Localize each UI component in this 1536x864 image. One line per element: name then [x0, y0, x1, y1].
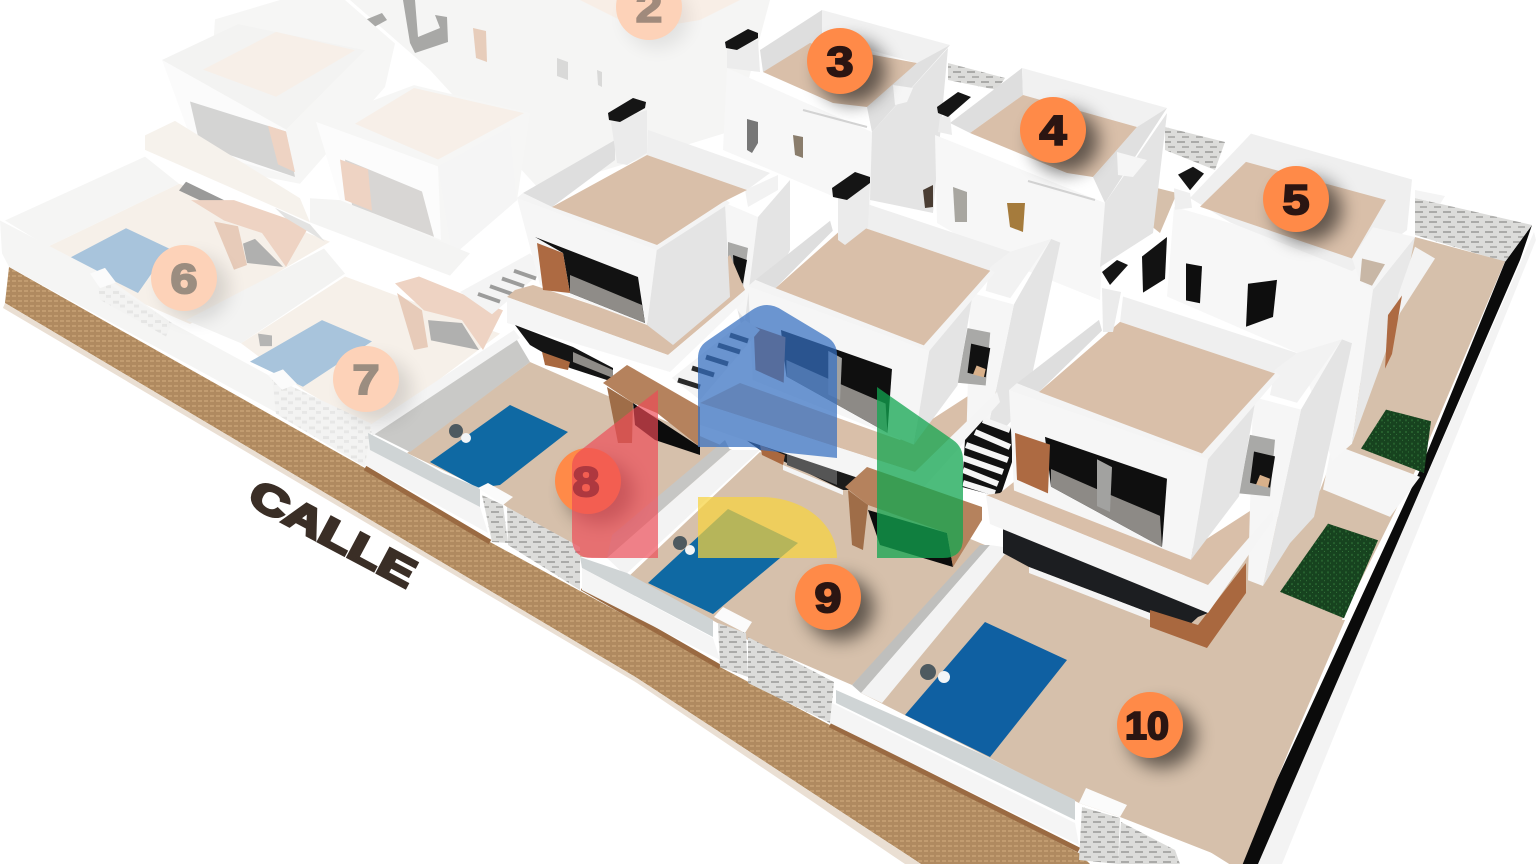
marker 7: 7 [352, 356, 380, 403]
marker 9: 9 [814, 574, 842, 621]
right-hand boundary wall [1238, 190, 1536, 864]
pergola lot 8 [603, 365, 700, 455]
pool 8 [430, 405, 568, 488]
gate pier 3 [1079, 788, 1127, 864]
chimney 5 [1174, 167, 1204, 210]
house 5 [1142, 134, 1435, 461]
street kerb line [3, 303, 921, 864]
marker 4: 4 [1040, 107, 1067, 154]
lot 9 ground and pool [607, 440, 985, 685]
street label: CALLE [242, 472, 423, 596]
chimney 3 [725, 29, 760, 72]
house C (front right, lot 10) [1009, 296, 1352, 586]
gate pier 2 [714, 607, 752, 677]
faded lot 7 [186, 249, 545, 430]
logo watermark [572, 305, 963, 558]
house B (front centre, lot 9) [748, 199, 1060, 469]
pool 9 [648, 509, 798, 614]
pergola lot 9 [845, 467, 982, 567]
marker 2 [616, 0, 689, 48]
marker 3 [807, 28, 886, 104]
marker 8: 8 [572, 458, 600, 505]
chimney B [832, 172, 870, 245]
marker 10: 10 [1125, 705, 1169, 748]
marker 6 [151, 245, 229, 320]
street brick strip [5, 267, 1090, 864]
marker 5 [1263, 166, 1342, 242]
marker 5: 5 [1282, 176, 1310, 223]
pool 10 [905, 622, 1067, 757]
house 4 [923, 68, 1167, 300]
logo: green house part [877, 387, 963, 558]
front wall lots 8, 9 and 10 [365, 433, 1180, 864]
back stone walls [948, 63, 1225, 233]
logo: blue house part [698, 305, 837, 458]
balcony floor C [986, 481, 1273, 585]
marker 8 [555, 448, 634, 524]
balcony band A [507, 290, 745, 372]
shower 8 [449, 424, 471, 443]
right-hand garden strip [1100, 237, 1505, 864]
faded upper-left house [145, 0, 395, 222]
balcony band B [700, 392, 1000, 497]
balcony band C [986, 495, 1273, 648]
faded left lots and houses [0, 0, 545, 467]
shower 9 [673, 536, 695, 555]
marker 9 [795, 564, 874, 640]
hedge: upper [1361, 410, 1431, 473]
lot 8 ground and pool [370, 330, 732, 558]
slats lot 9 [962, 418, 1012, 497]
lot 10 ground and pool [852, 545, 1345, 864]
logo: yellow arc part [698, 497, 837, 558]
shower 10 [920, 664, 950, 683]
windows A [535, 237, 645, 323]
gate pier 1 [478, 483, 513, 543]
slats lot 8 [672, 320, 760, 400]
marker 7 [333, 346, 412, 422]
marker 4 [1020, 97, 1099, 173]
faded lot 6 [5, 157, 330, 324]
marker 3: 3 [826, 38, 854, 85]
hedge: lower [1280, 524, 1378, 618]
house 3 [723, 10, 950, 215]
faded front wall [0, 220, 371, 467]
chimney A [608, 98, 647, 165]
balcony floor B [700, 383, 997, 472]
chimney C [1102, 260, 1128, 332]
faded upper houses 1 and 2 [350, 0, 770, 190]
faded central-left house [275, 85, 530, 276]
chimney 4 [937, 92, 971, 135]
marker 6: 6 [170, 255, 198, 302]
balcony floor A [507, 255, 745, 355]
marker 10 [1117, 692, 1196, 768]
logo: red house part [572, 390, 658, 558]
house A (front left, lot 8) [507, 98, 790, 382]
